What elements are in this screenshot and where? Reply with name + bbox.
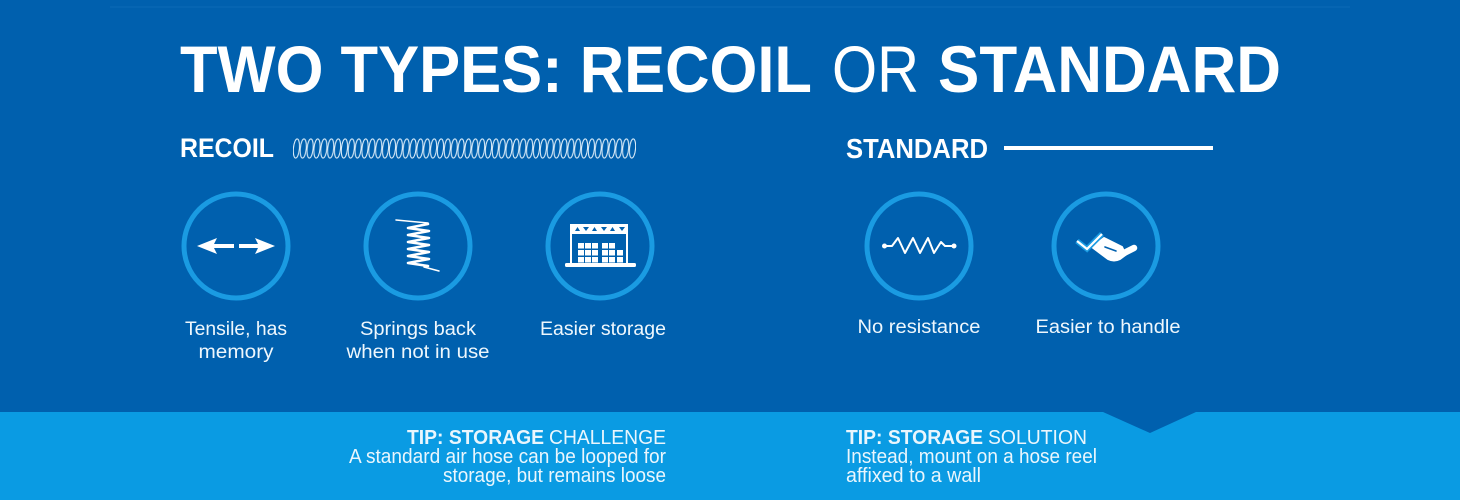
item: tensile xyxy=(184,194,288,363)
item: springs back: when not in use xyxy=(345,342,490,363)
icon: spring xyxy=(396,220,439,271)
tip: storage solution: Instead, mount on a hose reel xyxy=(846,446,1097,468)
item: no resistance xyxy=(858,194,980,338)
tip: storage challenge: storage, but remains loose xyxy=(443,465,666,487)
tip: storage challenge xyxy=(349,427,666,487)
panel: standard xyxy=(846,133,1213,338)
tip: storage solution: affixed to a wall xyxy=(846,465,981,487)
item: easier storage xyxy=(540,194,666,340)
title xyxy=(180,32,1281,106)
icon: warehouse xyxy=(565,224,636,267)
icon: check and hand xyxy=(1077,234,1134,260)
heading: recoil: RECOIL xyxy=(180,133,274,163)
tip: storage solution: TIP: STORAGE xyxy=(846,427,983,449)
tip: storage challenge: TIP: STORAGE xyxy=(407,427,544,449)
tip: storage challenge: CHALLENGE xyxy=(549,427,666,449)
icon: resistor xyxy=(882,238,956,253)
notch pointer xyxy=(1103,412,1196,433)
tip band xyxy=(0,412,1460,500)
title: TWO TYPES: RECOIL xyxy=(180,32,812,106)
tip: storage solution xyxy=(846,427,1097,487)
item: easier storage: Easier storage xyxy=(540,319,666,340)
icon: coiled hose xyxy=(293,136,636,161)
item: tensile: memory xyxy=(198,342,274,363)
title: STANDARD xyxy=(938,32,1281,106)
icon: straight hose xyxy=(1004,146,1213,150)
panel: recoil xyxy=(180,133,666,363)
item: easier to handle xyxy=(1036,194,1180,338)
item: easier to handle: Easier to handle xyxy=(1036,317,1180,338)
tip: storage challenge: A standard air hose can be looped for xyxy=(349,446,666,468)
item: springs back xyxy=(345,194,490,363)
title: OR xyxy=(832,32,919,106)
icon: double arrows xyxy=(197,238,275,254)
item: no resistance: No resistance xyxy=(858,317,980,338)
heading: standard: STANDARD xyxy=(846,133,988,164)
item: tensile: Tensile, has xyxy=(185,319,287,340)
tip: storage solution: SOLUTION xyxy=(988,427,1087,449)
item: springs back: Springs back xyxy=(360,319,477,340)
